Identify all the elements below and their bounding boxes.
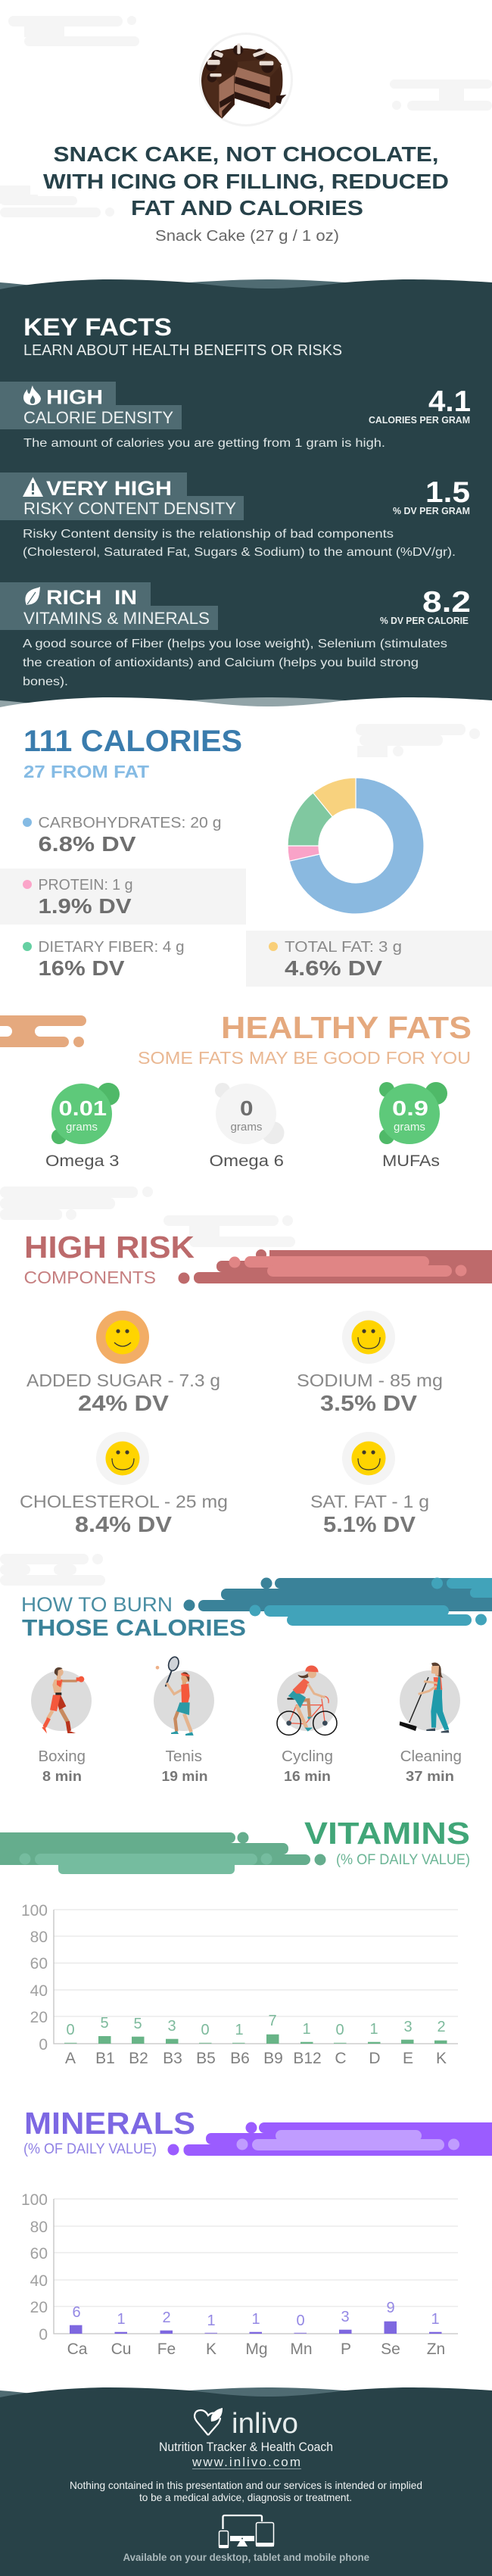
- decoration: red pills: [179, 1249, 492, 1284]
- bar chart: vitamins: 0: [66, 2022, 75, 2038]
- fact: risky content density: % DV PER GRAM: [393, 505, 470, 516]
- fact: rich in vitamins and minerals: RICH IN: [46, 586, 137, 609]
- component: saturated fat: 5.1% DV: [323, 1513, 416, 1537]
- title: WITH ICING OR FILLING, REDUCED: [43, 170, 449, 193]
- bar chart: minerals: Fe: [157, 2341, 176, 2358]
- component: sodium: SODIUM - 85 mg: [297, 1371, 443, 1390]
- panel: how to burn calories: [21, 1578, 492, 1784]
- component: added sugar: ADDED SUGAR - 7.3 g: [26, 1371, 220, 1390]
- icon: flame: [23, 385, 41, 405]
- nutrient: dietary fiber: DIETARY FIBER: 4 g: [38, 939, 185, 956]
- heading: key facts: KEY FACTS: [23, 313, 172, 341]
- icon: leaf: [25, 587, 40, 605]
- subheading: SOME FATS MAY BE GOOD FOR YOU: [138, 1048, 471, 1068]
- bar chart: minerals: [21, 2191, 458, 2358]
- badge: omega 6: Omega 6: [209, 1152, 284, 1170]
- bar chart: minerals: 1: [251, 2311, 260, 2328]
- bar chart: minerals: K: [206, 2341, 216, 2358]
- bar chart: minerals: 20: [30, 2299, 48, 2316]
- activity: cleaning: [400, 1663, 462, 1784]
- bar chart: minerals: Mg: [245, 2341, 268, 2358]
- bar chart: vitamins: 60: [30, 1955, 48, 1973]
- title: FAT AND CALORIES: [131, 196, 363, 220]
- badge: mufas: MUFAs: [382, 1152, 440, 1170]
- fact: calorie density: The amount of calories you are getting from 1 gram is high.: [23, 437, 385, 450]
- panel: high risk components: [20, 1230, 492, 1537]
- subheading: (% OF DAILY VALUE): [336, 1852, 470, 1868]
- fact: calorie density: HIGH: [46, 386, 103, 409]
- icon: devices: [219, 2515, 274, 2548]
- panel: footer: [0, 2387, 492, 2576]
- activity: tennis: 19 min: [162, 1769, 207, 1784]
- activity: boxing: [31, 1667, 92, 1784]
- activity: tennis: [154, 1655, 214, 1784]
- component: sodium: [297, 1311, 443, 1416]
- bar chart: vitamins: 20: [30, 2009, 48, 2026]
- badge: omega 6: grams: [230, 1121, 262, 1134]
- heading: 111 calories: 111 CALORIES: [23, 725, 242, 758]
- component: cholesterol: [20, 1432, 228, 1537]
- text: website: www.inlivo.com: [192, 2455, 300, 2469]
- fact: calorie density: CALORIE DENSITY: [23, 408, 173, 427]
- component: sodium: 3.5% DV: [320, 1392, 418, 1416]
- bar chart: minerals: Cu: [111, 2341, 131, 2358]
- bar chart: vitamins: 1: [302, 2021, 311, 2038]
- fact: rich in vitamins and minerals: the creation of antioxidants) and Calcium (helps you build strong: [23, 656, 419, 669]
- nutrient: protein: [23, 877, 133, 918]
- bar chart: vitamins: B2: [129, 2050, 148, 2067]
- bar chart: vitamins: 1: [235, 2022, 244, 2038]
- bar chart: minerals: Se: [381, 2341, 400, 2358]
- bar chart: vitamins: C: [335, 2050, 347, 2067]
- icon: warning triangle: [23, 477, 43, 497]
- fact: risky content density: (Cholesterol, Saturated Fat, Sugars & Sodium) to the amount (%DV/gr).: [23, 546, 456, 559]
- illustration: cake in ring: [200, 33, 292, 126]
- bar chart: vitamins: D: [369, 2050, 381, 2067]
- title: [43, 142, 449, 220]
- fact: risky content density: 1.5: [425, 476, 470, 509]
- bar chart: minerals: 0: [296, 2312, 305, 2329]
- bar chart: vitamins: 3: [403, 2019, 413, 2035]
- badge: omega 6: [209, 1083, 285, 1170]
- text: disclaimer: [70, 2479, 422, 2503]
- badge: omega 3: 0.01: [59, 1096, 107, 1120]
- heading: how to burn: HOW TO BURN: [21, 1593, 173, 1616]
- fact: risky content density: VERY HIGH: [46, 477, 172, 500]
- badge: omega 3: [45, 1083, 120, 1170]
- bar chart: vitamins: 2: [437, 2019, 446, 2035]
- bar chart: minerals: P: [341, 2341, 351, 2358]
- badge: mufas: 0.9: [392, 1096, 428, 1120]
- component: added sugar: 24% DV: [78, 1392, 170, 1416]
- panel: calories: [0, 725, 492, 987]
- nutrient: protein: 1.9% DV: [38, 894, 132, 918]
- fact: rich in vitamins and minerals: 8.2: [422, 586, 471, 619]
- fact: risky content density: Risky Content density is the relationship of bad components: [23, 528, 394, 541]
- bar chart: minerals: Mn: [290, 2341, 313, 2358]
- subtitle: Snack Cake (27 g / 1 oz): [155, 228, 339, 245]
- bar chart: vitamins: 0: [201, 2022, 210, 2038]
- bar chart: vitamins: B6: [230, 2050, 250, 2067]
- bar chart: vitamins: 40: [30, 1982, 48, 2000]
- bar chart: vitamins: B12: [293, 2050, 322, 2067]
- heading: vitamins: VITAMINS: [304, 1816, 470, 1851]
- fact: calorie density: CALORIES PER GRAM: [369, 414, 470, 426]
- bar chart: minerals: 3: [341, 2309, 350, 2325]
- panel: healthy fats: [0, 1010, 472, 1170]
- bar chart: minerals: 60: [30, 2245, 48, 2263]
- bar chart: vitamins: B5: [196, 2050, 216, 2067]
- bar chart: minerals: 40: [30, 2272, 48, 2290]
- fact: risky content density: RISKY CONTENT DENSITY: [23, 499, 236, 518]
- bar chart: vitamins: 0: [335, 2022, 344, 2038]
- bar chart: vitamins: E: [403, 2050, 413, 2067]
- bar chart: vitamins: K: [436, 2050, 447, 2067]
- bar chart: vitamins: A: [65, 2050, 76, 2067]
- nutrient: dietary fiber: 16% DV: [38, 956, 125, 980]
- panel: vitamins: [0, 1816, 470, 2067]
- activity: cycling: Cycling: [282, 1748, 333, 1765]
- fact: rich in vitamins and minerals: A good source of Fiber (helps you lose weight), Selenium (stimulates: [23, 638, 447, 650]
- badge: omega 3: Omega 3: [45, 1152, 120, 1170]
- bar chart: vitamins: B9: [263, 2050, 283, 2067]
- bar chart: minerals: Zn: [427, 2341, 445, 2358]
- bar chart: minerals: 100: [21, 2191, 48, 2209]
- component: cholesterol: CHOLESTEROL - 25 mg: [20, 1492, 228, 1511]
- bar chart: minerals: 6: [72, 2304, 81, 2321]
- component: saturated fat: SAT. FAT - 1 g: [310, 1492, 429, 1511]
- text: availability: Available on your desktop, tablet and mobile phone: [123, 2551, 369, 2563]
- bar chart: vitamins: 80: [30, 1929, 48, 1946]
- heading: those calories: THOSE CALORIES: [22, 1614, 246, 1641]
- decoration: green pills: [0, 1832, 325, 1874]
- nutrient: carbohydrates: [23, 815, 221, 856]
- bar chart: vitamins: 5: [133, 2016, 142, 2032]
- text: tagline: Nutrition Tracker & Health Coach: [159, 2440, 333, 2454]
- nutrient: dietary fiber: [23, 939, 185, 980]
- nutrient: total fat: TOTAL FAT: 3 g: [285, 939, 402, 956]
- subheading: components: COMPONENTS: [24, 1268, 156, 1287]
- activity: cleaning: Cleaning: [400, 1748, 462, 1765]
- subheading: 27 from fat: 27 FROM FAT: [23, 762, 149, 781]
- badge: mufas: grams: [394, 1121, 425, 1134]
- component: saturated fat: [310, 1432, 429, 1537]
- panel: minerals: [21, 2106, 492, 2358]
- bar chart: minerals: 1: [117, 2311, 126, 2328]
- fact: rich in vitamins and minerals: VITAMINS & MINERALS: [23, 609, 210, 628]
- fact: calorie density: [0, 382, 471, 450]
- bar chart: vitamins: 5: [100, 2015, 109, 2032]
- heading: key facts: LEARN ABOUT HEALTH BENEFITS OR RISKS: [23, 342, 342, 359]
- donut chart: [288, 778, 424, 914]
- nutrient: total fat: [269, 939, 402, 980]
- bar chart: vitamins: 3: [167, 2018, 176, 2035]
- text: disclaimer: to be a medical advice, diagnosis or treatment.: [139, 2491, 352, 2503]
- nutrient: carbohydrates: CARBOHYDRATES: 20 g: [38, 815, 221, 831]
- nutrient: carbohydrates: 6.8% DV: [38, 832, 136, 856]
- activity: cycling: [277, 1665, 338, 1784]
- bar chart: vitamins: B1: [95, 2050, 115, 2067]
- bar chart: minerals: Ca: [67, 2341, 88, 2358]
- badge: omega 3: grams: [66, 1121, 98, 1134]
- bar chart: minerals: 2: [162, 2309, 171, 2326]
- activity: cleaning: 37 min: [406, 1769, 454, 1784]
- bar chart: vitamins: [21, 1902, 458, 2067]
- activity: boxing: Boxing: [38, 1748, 86, 1765]
- decoration: peach pills: [0, 1015, 86, 1047]
- nutrient: protein: PROTEIN: 1 g: [38, 877, 133, 893]
- bar chart: minerals: 0: [39, 2326, 48, 2344]
- nutrient: total fat: 4.6% DV: [285, 956, 382, 980]
- logo: inlivo: [195, 2408, 298, 2440]
- panel: key facts: [0, 279, 492, 706]
- logo: inlivo: inlivo: [232, 2408, 298, 2440]
- activity: tennis: Tenis: [165, 1748, 202, 1765]
- decoration: teal pills: [183, 1578, 492, 1626]
- text: disclaimer: Nothing contained in this presentation and our services is intended or implied: [70, 2479, 422, 2491]
- bar chart: vitamins: 7: [268, 2013, 277, 2029]
- heading: high risk: HIGH RISK: [24, 1230, 195, 1265]
- title: SNACK CAKE, NOT CHOCOLATE,: [53, 142, 439, 166]
- fact: rich in vitamins and minerals: % DV PER CALORIE: [380, 615, 469, 626]
- bar chart: vitamins: 1: [369, 2021, 378, 2038]
- heading: key facts: [23, 313, 342, 359]
- activity: boxing: 8 min: [42, 1769, 82, 1784]
- bar chart: minerals: 80: [30, 2219, 48, 2236]
- bar chart: minerals: 1: [207, 2312, 216, 2329]
- subheading: (% OF DAILY VALUE): [23, 2141, 157, 2157]
- bar chart: vitamins: 100: [21, 1902, 48, 1920]
- bar chart: vitamins: B3: [163, 2050, 182, 2067]
- badge: omega 6: 0: [240, 1096, 253, 1120]
- heading: minerals: MINERALS: [24, 2106, 195, 2141]
- bar chart: minerals: 1: [431, 2311, 440, 2328]
- heading: healthy fats: HEALTHY FATS: [221, 1010, 472, 1045]
- fact: rich in vitamins and minerals: bones).: [23, 675, 68, 688]
- bar chart: vitamins: 0: [39, 2036, 48, 2054]
- component: cholesterol: 8.4% DV: [75, 1513, 173, 1537]
- fact: risky content density: [0, 472, 470, 559]
- decoration: purple pills: [168, 2122, 492, 2156]
- fact: calorie density: 4.1: [428, 385, 471, 418]
- activity: cycling: 16 min: [284, 1769, 331, 1784]
- component: added sugar: [26, 1311, 220, 1416]
- fact: rich in vitamins and minerals: [0, 582, 471, 688]
- badge: mufas: [379, 1082, 447, 1170]
- bar chart: minerals: 9: [386, 2300, 395, 2316]
